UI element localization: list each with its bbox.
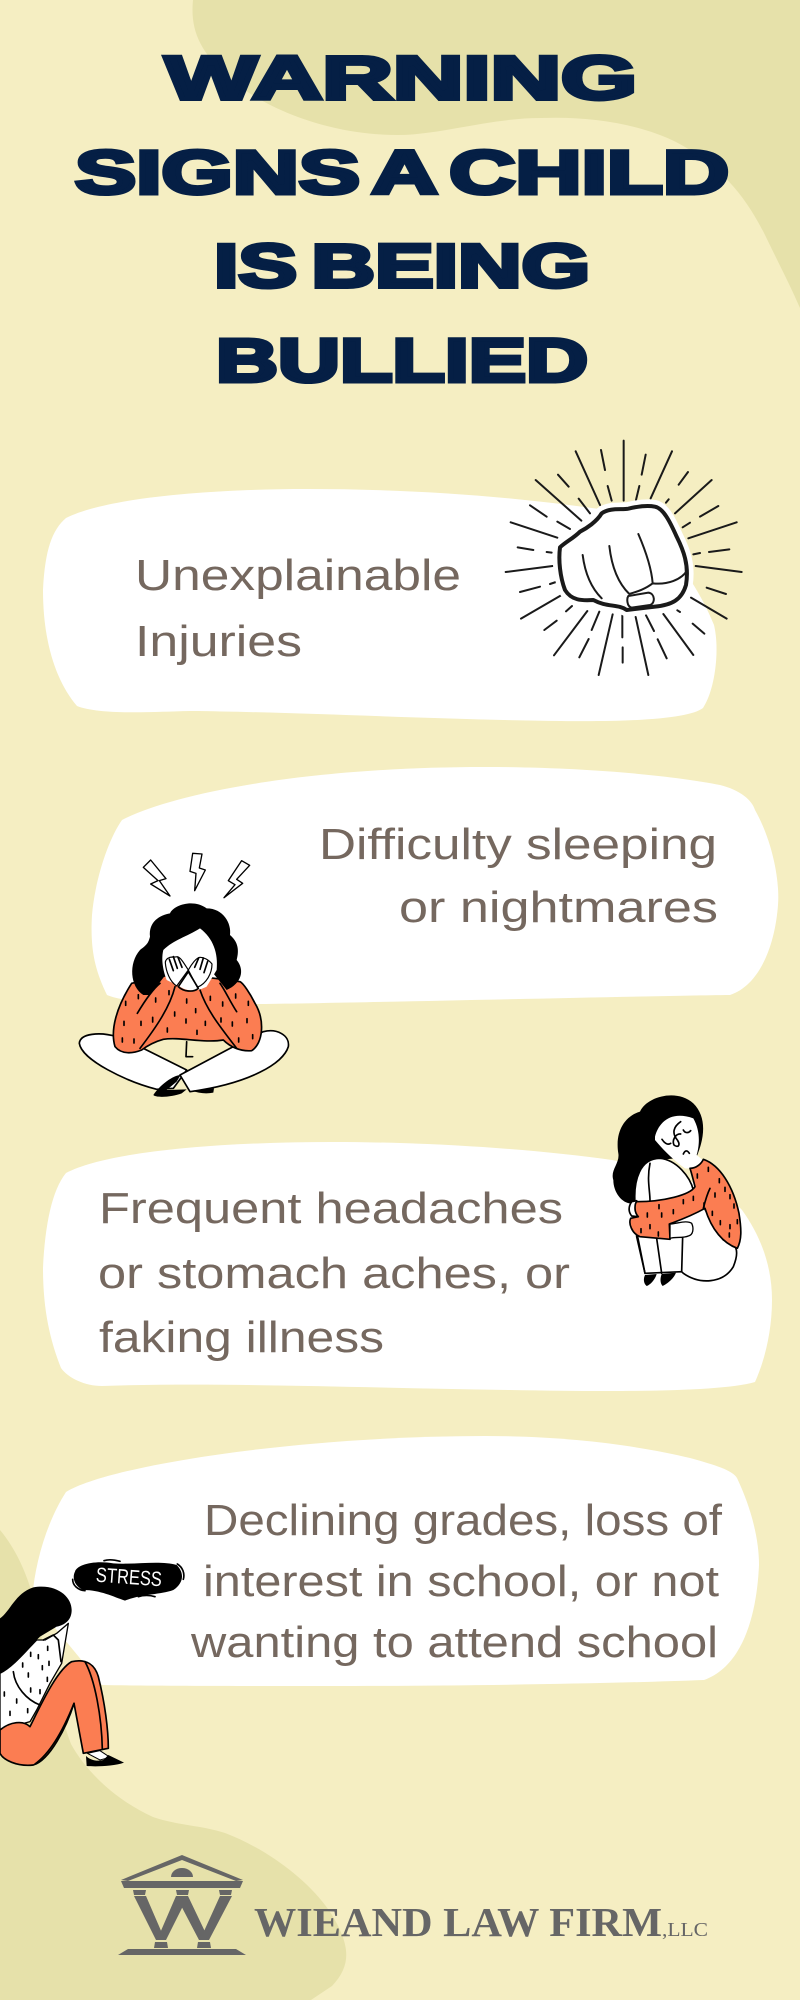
- title: BULLIED: [216, 326, 588, 394]
- panel: frequent headaches: [43, 1142, 772, 1391]
- panel: declining grades: wanting to attend school: [190, 1618, 718, 1667]
- logo: Wieand Law Firm: [118, 1855, 708, 1955]
- logo: Wieand Law Firm: ,LLC: [662, 1919, 708, 1941]
- icon: girl covering her face with lightning bolts: [79, 853, 288, 1097]
- panel: declining grades: Declining grades, loss of: [204, 1496, 723, 1545]
- panel: declining grades: [32, 1436, 759, 1686]
- panel: declining grades: interest in school, or not: [203, 1557, 719, 1606]
- title: [75, 44, 729, 394]
- panel: difficulty sleeping: Difficulty sleeping: [319, 820, 717, 869]
- panel: unexplainable injuries: Unexplainable: [135, 551, 461, 600]
- icon: fist with burst lines: [506, 441, 742, 675]
- panel: difficulty sleeping: or nightmares: [399, 883, 718, 932]
- panel: unexplainable injuries: [43, 489, 717, 721]
- title: WARNING: [165, 44, 637, 112]
- icon: stress speech bubble: [73, 1560, 184, 1601]
- panel: frequent headaches: Frequent headaches: [99, 1184, 563, 1233]
- title: IS BEING: [214, 232, 590, 300]
- icon: temple W mark: [118, 1855, 246, 1955]
- title: SIGNS A CHILD: [75, 138, 729, 206]
- logo: Wieand Law Firm: WIEAND LAW FIRM: [254, 1899, 662, 1945]
- panel: frequent headaches: faking illness: [99, 1313, 384, 1362]
- icon: stress speech bubble: STRESS: [95, 1564, 163, 1591]
- icon: girl hugging her knees: [613, 1095, 741, 1286]
- icon: girl sitting with head on hand: [0, 1587, 124, 1766]
- panel: frequent headaches: or stomach aches, or: [98, 1249, 570, 1298]
- panel: unexplainable injuries: Injuries: [135, 617, 302, 666]
- panel: difficulty sleeping: [92, 767, 778, 1004]
